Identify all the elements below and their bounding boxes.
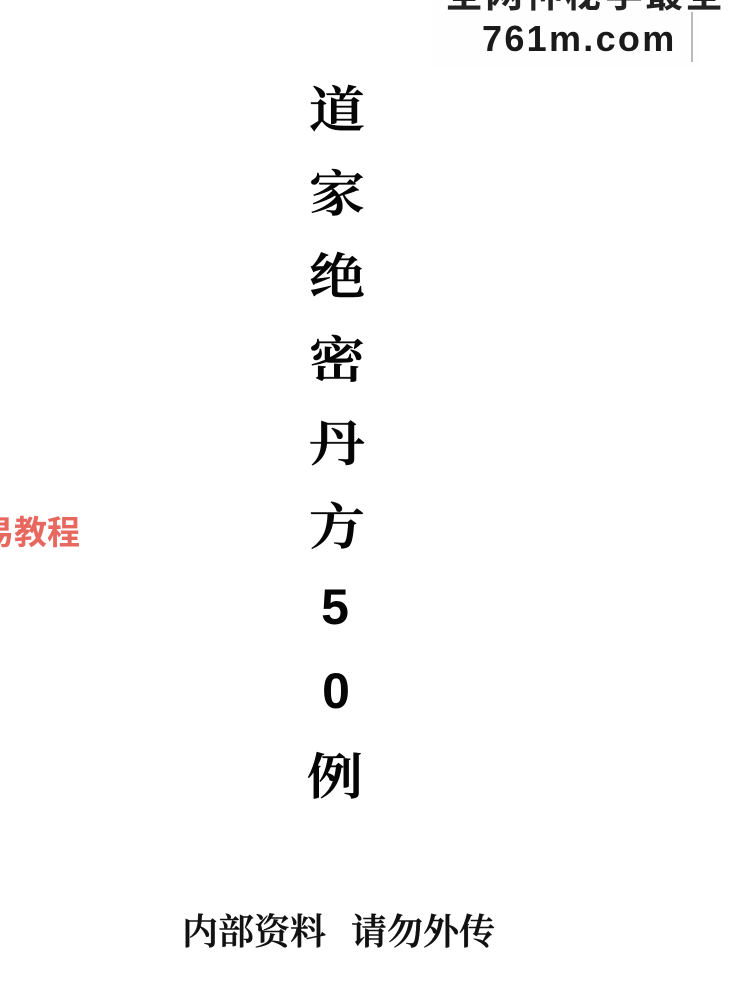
- title character 丹: 丹: [309, 404, 365, 475]
- watermark site address: 761m.com: [482, 18, 676, 59]
- title digit 5: 5: [321, 579, 349, 635]
- footer notice: 内部资料 请勿外传: [182, 904, 495, 955]
- watermark background: [432, 0, 698, 66]
- title character 例: 例: [307, 737, 363, 808]
- title character 绝: 绝: [309, 237, 365, 308]
- title character 密: 密: [309, 320, 365, 391]
- watermark: site banner: [445, 0, 725, 62]
- title digit 0: 0: [322, 663, 350, 719]
- title character 方: 方: [309, 487, 365, 558]
- title character 家: 家: [309, 154, 365, 225]
- title: vertical column: [307, 70, 365, 808]
- watermark cursor line: [691, 12, 693, 62]
- title character 道: 道: [309, 70, 365, 141]
